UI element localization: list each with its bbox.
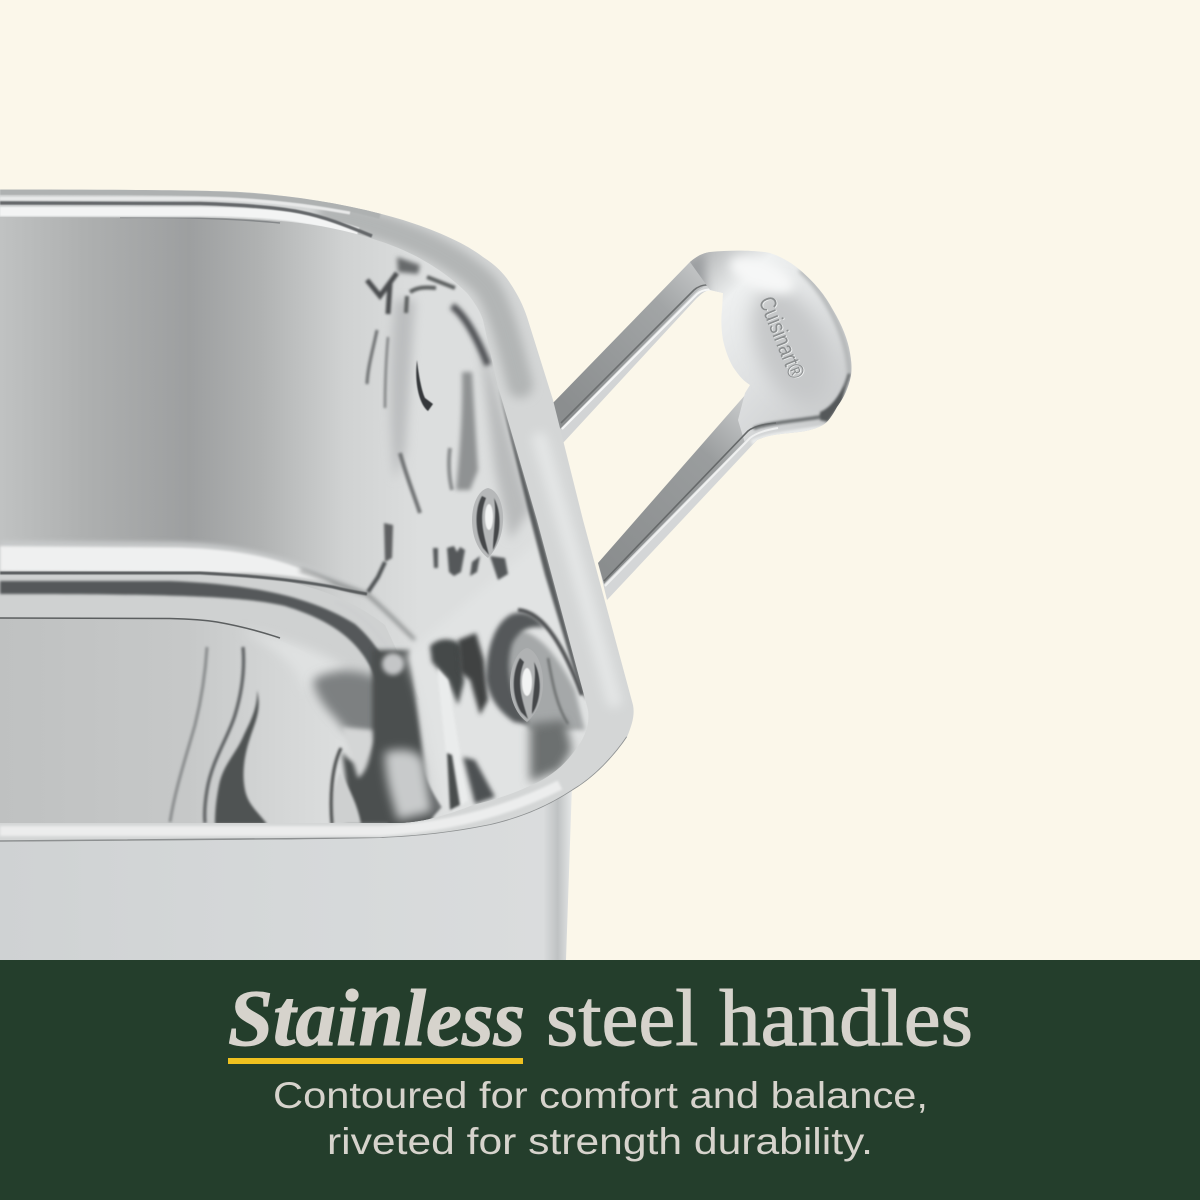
- back wall: [0, 217, 490, 595]
- floor grey blob: [313, 671, 380, 738]
- embossed logo: Cuisinart®: [754, 293, 810, 382]
- ledge upper curve dark: [300, 570, 415, 640]
- ledge lower region: [0, 574, 394, 648]
- plate bottom shine: [752, 427, 830, 443]
- lower corner dark: [530, 720, 572, 782]
- upper wall soft shade right: [478, 330, 530, 540]
- plate shadow top-left: [690, 254, 711, 290]
- wall light right side: [405, 540, 590, 815]
- heading: steel handles: [546, 975, 973, 1063]
- embossed logo shadow: Cuisinart®: [755, 293, 811, 383]
- floor swoosh: [215, 690, 267, 824]
- bottom rim white: [0, 785, 560, 831]
- rivet 1: [472, 488, 503, 558]
- lower dark streak 2: [463, 757, 495, 804]
- lower mark top-left: [384, 523, 393, 562]
- plate highlight: [728, 254, 794, 297]
- faint floor line: [170, 647, 207, 822]
- panel background: [0, 960, 1200, 1200]
- ledge curve highlight: [335, 602, 396, 662]
- rivet 2 shadows: [514, 658, 540, 719]
- swirl dark left: [486, 613, 545, 725]
- heading underline: [228, 1058, 523, 1064]
- floor dark column: [342, 650, 432, 825]
- top rim light: [0, 198, 350, 213]
- caption panel: [0, 960, 1200, 1200]
- Y-shaped marks: [367, 273, 397, 314]
- curved rim grey tone: [330, 215, 520, 385]
- top corner streaks: [406, 277, 455, 313]
- pot body: [0, 785, 572, 960]
- light patch upper: [382, 653, 404, 675]
- plate bottom edge shadow: [755, 375, 849, 428]
- wall dark comma: [416, 360, 433, 411]
- rim shading: [0, 192, 627, 841]
- rivet 1 body: [472, 488, 503, 558]
- lower strap body: [598, 390, 775, 600]
- floor light patch: [270, 640, 338, 671]
- light wedge: [342, 728, 372, 778]
- rim silhouette: [0, 190, 634, 842]
- plate base: [690, 250, 852, 442]
- ledge dark line 1: [0, 573, 367, 594]
- ledge white band: [0, 546, 335, 584]
- inner top dark line: [120, 217, 280, 223]
- lower mark diagonal: [368, 562, 385, 592]
- rivet 2: [510, 648, 543, 722]
- second floor line: [205, 647, 244, 823]
- plate outer edge shade: [800, 270, 850, 375]
- swirl thin line: [548, 658, 568, 724]
- top rim dark line: [0, 203, 372, 236]
- central dark blob right: [458, 633, 488, 715]
- lower strap highlight: [605, 428, 778, 586]
- swirl arc: [518, 610, 582, 695]
- rivet 1 glint: [485, 504, 493, 530]
- interior surfaces: [0, 215, 600, 835]
- upper strap body: [553, 262, 723, 443]
- grey streak small: [449, 448, 452, 490]
- top corner blob: [397, 257, 420, 274]
- rivet 2 body: [510, 648, 543, 722]
- small marks under rivet: [433, 546, 508, 580]
- wall line left: [367, 330, 377, 384]
- upper strap dark line: [561, 285, 720, 423]
- light patch lower: [385, 750, 432, 820]
- triangle light: [332, 772, 361, 824]
- body line 2: riveted for strength durability.: [327, 1121, 873, 1162]
- upper strap dark face: [553, 252, 712, 429]
- floor thin line: [0, 618, 280, 638]
- upper wall soft shades: [390, 300, 415, 480]
- body line 1: Contoured for comfort and balance,: [273, 1075, 928, 1116]
- upper strap highlight: [562, 290, 722, 429]
- swirl grey interior: [507, 630, 585, 730]
- wall lower line: [400, 453, 420, 513]
- lower strap dark face: [598, 394, 758, 584]
- floor: [0, 619, 349, 823]
- icon: stainless steel handle: [553, 245, 855, 600]
- lower dark streak 1: [447, 753, 460, 810]
- heading: Stainless: [228, 975, 525, 1063]
- plate: [690, 250, 852, 444]
- top rim band: [0, 192, 380, 216]
- plate recess: [746, 291, 830, 400]
- bottom rim edge: [0, 737, 627, 841]
- rim shadow streak: [452, 306, 488, 365]
- rim inner dark line: [486, 337, 586, 700]
- rivet 2 glint: [522, 668, 532, 696]
- top rim white band: [0, 212, 358, 232]
- corner dark line: [331, 748, 341, 824]
- right rim light: [540, 440, 614, 700]
- lower strap dark line: [604, 423, 776, 581]
- lower strap: [598, 390, 775, 600]
- ledge dark band 2: [0, 581, 442, 825]
- pot interior and rim: [0, 190, 634, 842]
- grey streak: [456, 372, 478, 490]
- light streak lower left: [437, 668, 468, 812]
- wall line right: [385, 337, 388, 408]
- ledge top sheen: [5, 540, 296, 565]
- plate corner dark: [820, 385, 845, 422]
- background: [0, 0, 1200, 960]
- central dark blob left: [430, 639, 464, 705]
- rivet 1 shadows: [476, 496, 500, 555]
- upper strap: [553, 252, 723, 443]
